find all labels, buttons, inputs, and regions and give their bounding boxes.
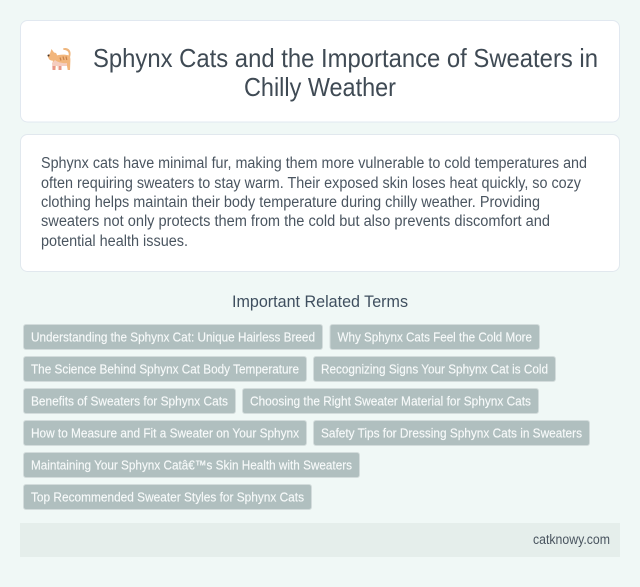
icon: cat — [48, 48, 71, 70]
tag: body temperature — [24, 356, 306, 382]
tag: material: Choosing the Right Sweater Material for Sphynx Cats — [250, 394, 531, 408]
tag: sweater styles: Top Recommended Sweater Styles for Sphynx Cats — [31, 490, 304, 504]
tag: feel the cold — [330, 324, 540, 350]
tag: unique hairless breed: Understanding the Sphynx Cat: Unique Hairless Breed — [31, 330, 315, 344]
tag: safety tips — [314, 420, 590, 446]
panel: description — [20, 134, 620, 272]
tag: unique hairless breed — [24, 324, 322, 350]
tag: skin health — [24, 452, 360, 478]
tag: feel the cold: Why Sphynx Cats Feel the Cold More — [338, 330, 532, 344]
description text: clothing helps maintain their body temperature during chilly weather. Providing — [41, 194, 540, 211]
heading: related terms: Important Related Terms — [232, 293, 408, 311]
tag: recognizing signs: Recognizing Signs Your Sphynx Cat is Cold — [321, 362, 548, 376]
description text: often requiring sweaters to stay warm. Their exposed skin loses heat quickly, so cozy — [41, 175, 581, 192]
description text: potential health issues. — [41, 233, 188, 250]
description text: sweaters not only protects them from the cold but also prevents discomfort and — [41, 213, 550, 230]
title: Chilly Weather — [244, 72, 396, 102]
footer — [20, 523, 620, 557]
tag: recognizing signs — [314, 356, 556, 382]
tag: skin health: Maintaining Your Sphynx Catâ€™s Skin Health with Sweaters — [31, 458, 352, 472]
tag: material — [242, 388, 538, 414]
tag: body temperature: The Science Behind Sphynx Cat Body Temperature — [31, 362, 299, 376]
tag: measure and fit: How to Measure and Fit a Sweater on Your Sphynx — [31, 426, 299, 440]
title: Sphynx Cats and the Importance of Sweaters in — [93, 43, 598, 73]
tag: benefits: Benefits of Sweaters for Sphynx Cats — [31, 394, 228, 408]
footer source: catknowy.com — [533, 532, 610, 547]
description text: Sphynx cats have minimal fur, making them more vulnerable to cold temperatures and — [41, 155, 587, 172]
header panel — [20, 20, 620, 122]
tag: safety tips: Safety Tips for Dressing Sphynx Cats in Sweaters — [321, 426, 582, 440]
tag: measure and fit — [24, 420, 306, 446]
title — [93, 43, 598, 102]
tag: sweater styles — [24, 484, 312, 510]
tag: benefits — [24, 388, 236, 414]
related terms tags — [24, 324, 590, 510]
description text — [41, 155, 587, 250]
